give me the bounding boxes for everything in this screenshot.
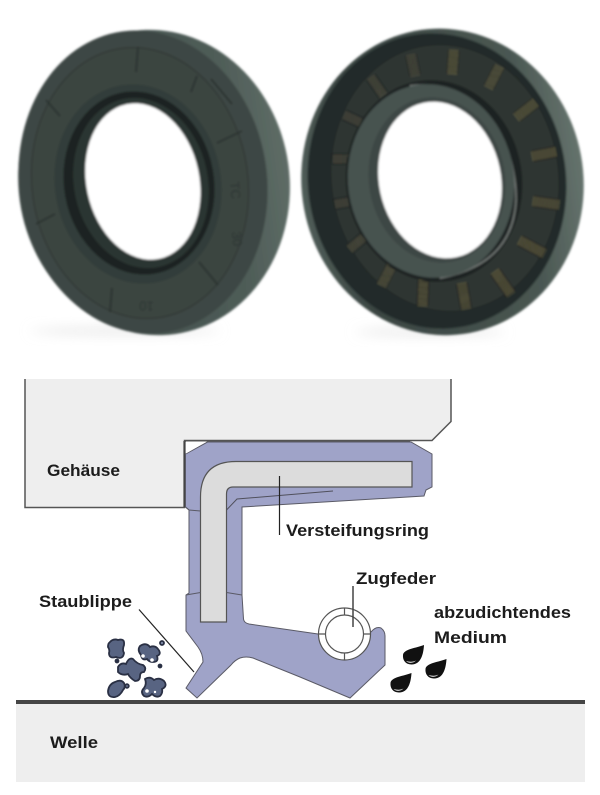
dust specks [160, 641, 164, 645]
droplet 1 [403, 645, 424, 664]
dust blob 4 [108, 681, 125, 697]
label: Welle: Welle [50, 733, 98, 752]
bore [71, 92, 215, 271]
inner seal edge [226, 491, 333, 510]
garter spring groove [333, 69, 535, 293]
inner lip [335, 73, 527, 289]
oil droplets [390, 645, 446, 692]
outer rim [0, 12, 310, 353]
bore [364, 90, 516, 270]
label: abzudichtendes: abzudichtendes [434, 603, 571, 622]
ring shadow [355, 329, 505, 335]
label: Zugfeder: Zugfeder [356, 569, 436, 588]
label: Versteifungsring: Versteifungsring [286, 521, 429, 540]
embossed lettering: TC [227, 181, 243, 200]
chamfer gap [186, 442, 207, 454]
embossed lettering [139, 181, 245, 314]
photo: seal spring side [282, 10, 600, 354]
droplet 2 [425, 659, 446, 678]
dust blob 1 [108, 639, 124, 658]
seal body [186, 442, 432, 698]
tension spring [318, 608, 370, 660]
housing bore wall [183, 441, 186, 507]
shaft [16, 700, 585, 782]
recess around the bore [39, 71, 237, 297]
seal cross-section [186, 442, 432, 698]
dust blob 2 [139, 644, 160, 662]
label: Staublippe: Staublippe [39, 592, 132, 611]
ring shadow [30, 328, 220, 334]
housing [25, 379, 451, 508]
leader line: Staublippe [139, 610, 194, 672]
embossed lettering: 10 [139, 298, 154, 314]
spring chamber [313, 29, 577, 327]
leader line: Zugfeder [352, 586, 354, 627]
label: Medium: Medium [434, 628, 507, 647]
leader line: Versteifungsring [278, 476, 280, 535]
dust particles [108, 639, 166, 697]
label: Gehäuse: Gehäuse [47, 461, 120, 480]
spring segments [332, 50, 560, 310]
embossed lettering: 30 [229, 231, 245, 247]
outer rim [282, 10, 600, 354]
dust blob 5 [142, 678, 166, 697]
dust blob 3 [118, 659, 145, 681]
garter spring highlight [410, 85, 516, 278]
segment marks [36, 47, 242, 312]
mould seam left [186, 507, 242, 595]
droplet 3 [390, 673, 412, 692]
photo: seal front side [0, 12, 310, 353]
stiffening ring [200, 462, 412, 622]
